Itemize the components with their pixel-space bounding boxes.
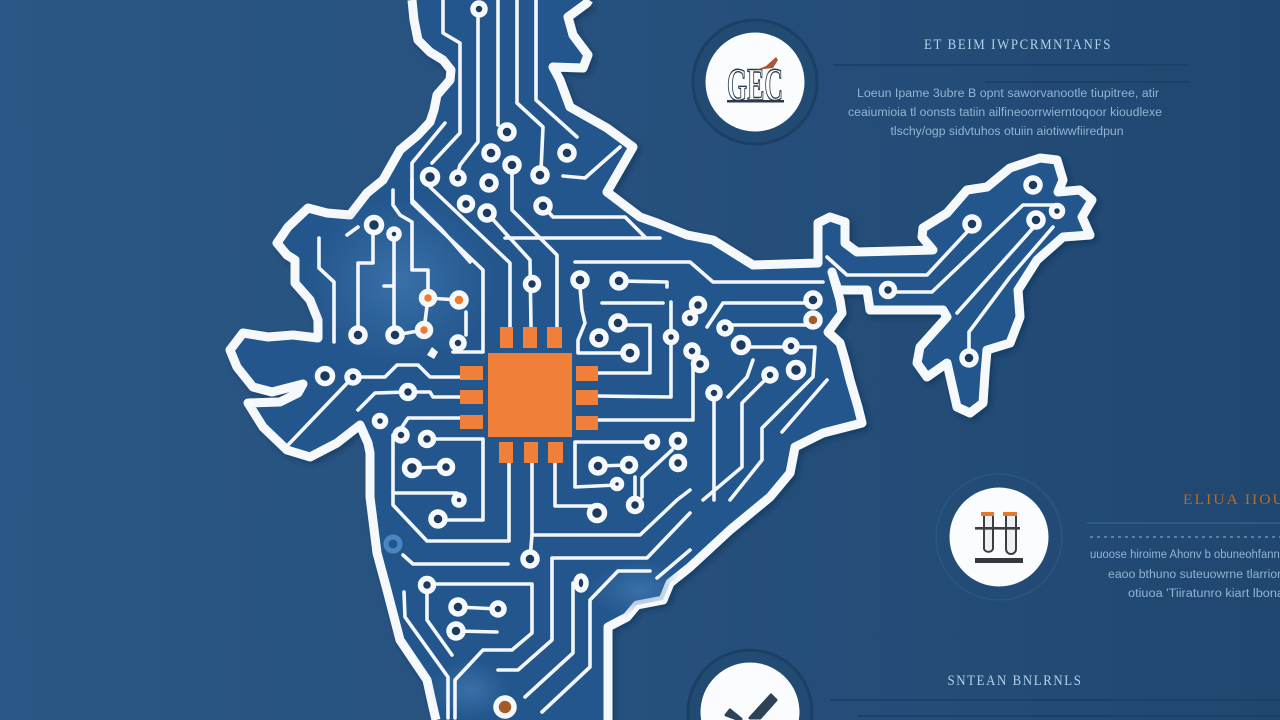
body text: tlschy/ogp sidvtuhos otuiin aiotiwwfiiredpun (890, 126, 1124, 138)
icon: test tubes (936, 474, 1062, 600)
panel: top right (693, 20, 1190, 144)
body text: otiuoa 'Tiiratunro kiart lbona (1128, 588, 1280, 600)
icon: document letters with brush: GEC (727, 59, 783, 111)
panel: bottom right (688, 650, 1280, 720)
chip right pins (576, 366, 598, 430)
body text: Loeun Ipame 3ubre B opnt saworvanootle tiupitree, atir (857, 88, 1159, 100)
body text: eaoo bthuno suteuowrne tlarrion (1108, 569, 1280, 581)
interior glow (332, 211, 679, 712)
circuit traces (288, 0, 1057, 718)
chip body (488, 353, 572, 437)
icon: document letters with brush (693, 20, 817, 144)
icon: check mark (688, 650, 812, 720)
body text (1090, 549, 1280, 600)
body text (848, 88, 1162, 138)
orange processor chip (460, 327, 598, 463)
divider rules (830, 700, 1280, 716)
map fill and outline (230, 0, 1092, 720)
heading: ET BEIM IWPCRMNTANFS (924, 37, 1112, 53)
chip left pins (460, 366, 483, 429)
heading: SNTEAN BNLRNLS (948, 673, 1082, 689)
circuit pads (318, 3, 1062, 716)
chip top pins (500, 327, 562, 348)
divider rules (833, 65, 1190, 82)
map of India as circuit board (230, 0, 1092, 720)
panel: middle right (936, 474, 1280, 600)
body text: ceaiumioia tl oonsts tatiin ailfineoorrwierntoqoor kioudlexe (848, 107, 1162, 119)
chip bottom pins (499, 442, 563, 463)
divider rules (1087, 523, 1280, 537)
